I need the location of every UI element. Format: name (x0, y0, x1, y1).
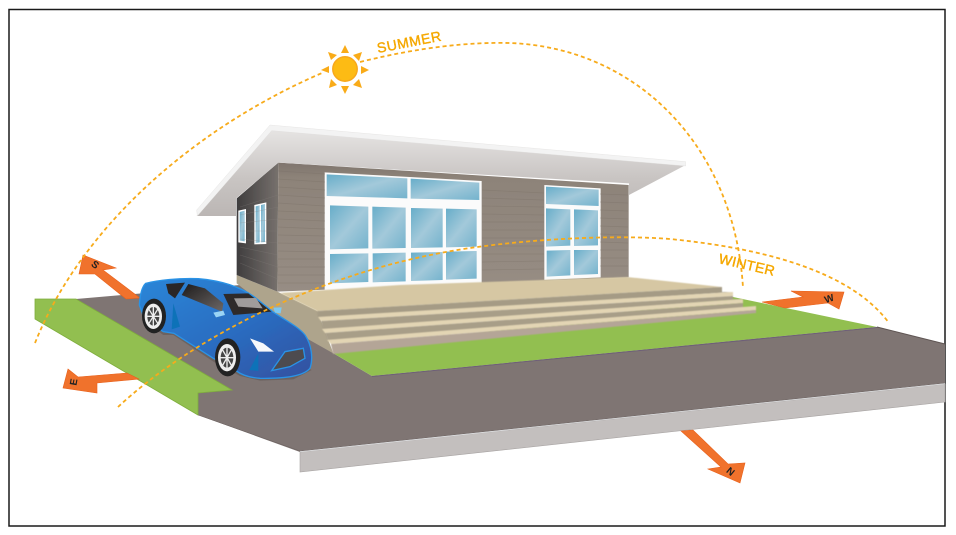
grass: front lawn (333, 297, 945, 376)
roof edge (197, 125, 686, 216)
label: winter: WINTER (717, 250, 776, 279)
front wheel (215, 338, 240, 376)
arrow: north (681, 430, 745, 483)
riser 2 (321, 296, 743, 330)
grass: left verge (35, 299, 232, 415)
riser 1 (317, 287, 733, 318)
rear wheel (142, 299, 166, 333)
ground: road and driveway (76, 285, 945, 452)
foundation side (237, 275, 333, 353)
car shadow (142, 303, 312, 381)
deck and steps (280, 277, 756, 354)
icon: sun (321, 45, 369, 94)
arrow: west: W (823, 292, 836, 306)
summer sun path (35, 43, 743, 343)
winter sun path (118, 237, 889, 407)
house (197, 125, 686, 353)
arrow: east: E (68, 378, 81, 386)
tread 3 (327, 306, 756, 344)
arrow: south: S (89, 259, 101, 272)
headlight (250, 338, 274, 352)
tread 1 (318, 292, 733, 321)
windshield (223, 293, 272, 315)
rear side window (166, 283, 185, 298)
door scoop (172, 303, 180, 329)
right window (544, 185, 601, 280)
mirror right (273, 307, 282, 313)
side window (182, 284, 223, 312)
arrow: south (79, 255, 140, 299)
deck top (280, 277, 722, 311)
front wall (277, 163, 629, 292)
mirror left (213, 311, 225, 317)
car (139, 279, 312, 381)
riser 3 (325, 303, 756, 341)
arrow: east (63, 369, 139, 393)
kerb (198, 383, 945, 472)
arrow: west (762, 291, 844, 309)
car body (139, 279, 312, 378)
arrow: north: N (724, 466, 736, 479)
side wall (237, 163, 278, 292)
roof underside (197, 130, 686, 216)
riser 4 (331, 310, 756, 354)
front grille (272, 348, 305, 371)
windshield reflection (234, 298, 263, 308)
label: summer: SUMMER (376, 28, 442, 56)
front scoop (249, 353, 258, 371)
tread 2 (322, 299, 743, 333)
large window (325, 172, 482, 290)
side windows (238, 202, 266, 244)
